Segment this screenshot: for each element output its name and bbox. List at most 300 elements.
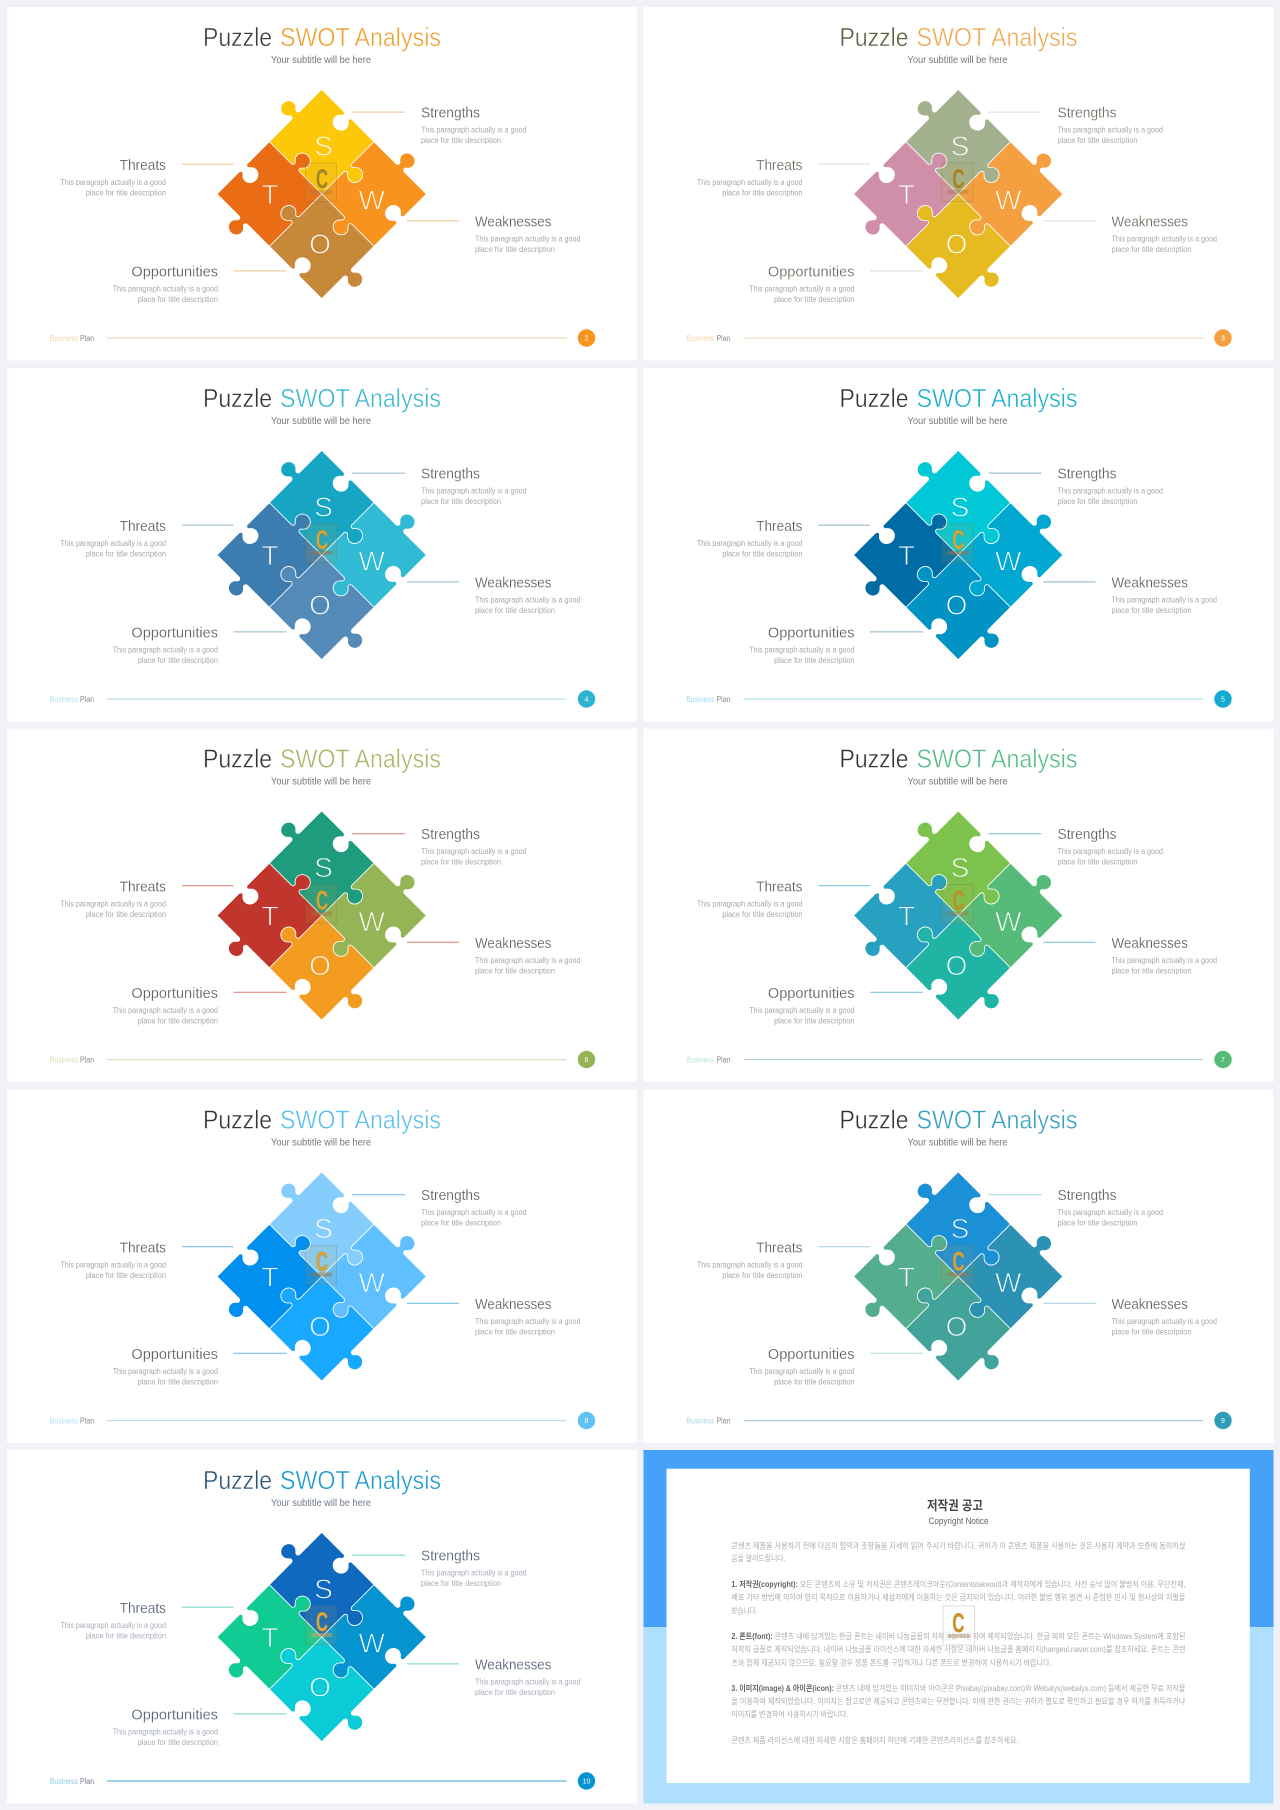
- threats block: [697, 880, 870, 919]
- footer: Business: [686, 695, 714, 704]
- puzzle diamond: T: [898, 900, 915, 932]
- opportunities block: This paragraph actually is a good: [113, 646, 218, 655]
- strengths block: This paragraph actually is a good: [1058, 486, 1163, 496]
- strengths block: Strengths: [421, 106, 480, 122]
- footer: 6: [585, 1057, 589, 1064]
- strengths block: This paragraph actually is a good: [421, 126, 526, 134]
- strengths block: place for title description: [1058, 1218, 1138, 1228]
- strengths block: [352, 106, 526, 145]
- strengths block: place for title description: [1058, 497, 1138, 506]
- watermark logo: C: [952, 525, 964, 555]
- footer: [686, 329, 1232, 347]
- puzzle diamond: W: [358, 906, 385, 937]
- title: Puzzle: [203, 744, 272, 774]
- puzzle diamond: O: [309, 1671, 331, 1702]
- opportunities block: This paragraph actually is a good: [113, 1367, 218, 1376]
- threats block: [60, 1601, 234, 1640]
- weaknesses block: Weaknesses: [475, 1658, 551, 1674]
- strengths block: Strengths: [1058, 827, 1116, 843]
- threats block: place for title description: [722, 1271, 802, 1280]
- footer: [50, 1772, 595, 1790]
- watermark logo: C: [316, 886, 328, 916]
- watermark logo: [306, 884, 336, 923]
- weaknesses block: [407, 936, 580, 976]
- weaknesses block: [1044, 1297, 1217, 1336]
- puzzle diamond: W: [995, 184, 1022, 215]
- threats block: Threats: [120, 519, 166, 535]
- copyright clause 3: 3. 이미지(image) & 아이콘(icon): 콘텐츠 내에 담겨있는 이미지와 아이콘은 Pixabay(pixabay.com)와 Webalys(webalys.com) 등에서 제공한 무료 저작물: [731, 1683, 1185, 1693]
- footer: 10: [583, 1778, 590, 1786]
- panel: slide 2 orange: [7, 7, 637, 360]
- footer: [686, 1051, 1232, 1068]
- opportunities block: place for title description: [774, 656, 854, 665]
- puzzle diamond: S: [314, 852, 333, 883]
- threats block: Threats: [756, 1240, 802, 1256]
- title: Puzzle: [203, 383, 272, 413]
- puzzle diamond: O: [946, 1311, 967, 1342]
- puzzle diamond: [841, 77, 1075, 311]
- threats block: [60, 880, 234, 919]
- puzzle diamond: S: [951, 1213, 969, 1244]
- footer: Plan: [716, 334, 730, 343]
- title: Puzzle: [203, 1465, 272, 1495]
- strengths block: This paragraph actually is a good: [1058, 1208, 1163, 1217]
- weaknesses block: place for title description: [1112, 966, 1192, 976]
- footer: [50, 690, 595, 708]
- opportunities block: This paragraph actually is a good: [113, 1728, 218, 1737]
- strengths block: [988, 1188, 1163, 1228]
- threats block: place for title description: [722, 550, 802, 558]
- puzzle diamond: O: [309, 589, 331, 620]
- watermark logo: C: [316, 164, 328, 194]
- strengths block: place for title description: [1058, 136, 1138, 145]
- footer: Plan: [80, 1416, 94, 1426]
- puzzle diamond: T: [261, 900, 279, 932]
- threats block: This paragraph actually is a good: [60, 1621, 166, 1630]
- watermark logo: [943, 1606, 975, 1645]
- weaknesses block: place for title description: [1112, 245, 1192, 254]
- opportunities block: [113, 265, 286, 304]
- footer: Business: [50, 695, 78, 704]
- panel: slide 10 navy teal: [7, 1450, 637, 1804]
- threats block: place for title description: [86, 910, 166, 919]
- weaknesses block: This paragraph actually is a good: [1112, 596, 1217, 605]
- strengths block: Strengths: [1058, 106, 1116, 122]
- footer: Plan: [80, 695, 94, 704]
- weaknesses block: Weaknesses: [1112, 936, 1188, 952]
- puzzle diamond: [205, 1159, 439, 1394]
- strengths block: Strengths: [421, 1548, 480, 1564]
- puzzle diamond: W: [358, 1627, 385, 1658]
- puzzle diamond: S: [951, 491, 969, 522]
- title: Puzzle: [840, 22, 908, 52]
- puzzle diamond: S: [314, 1573, 333, 1604]
- puzzle diamond: T: [898, 179, 915, 210]
- opportunities block: This paragraph actually is a good: [749, 1006, 854, 1015]
- threats block: place for title description: [722, 188, 802, 198]
- panel: slide 6 multicolor: [7, 728, 637, 1082]
- opportunities block: place for title description: [138, 1016, 218, 1026]
- threats block: [697, 158, 870, 198]
- watermark logo: [306, 163, 336, 202]
- subtitle: Your subtitle will be here: [271, 1138, 371, 1148]
- copyright clause 3: 이미지를 변경하여 사용하시기 바랍니다.: [731, 1709, 848, 1719]
- opportunities block: This paragraph actually is a good: [749, 1367, 854, 1376]
- strengths block: This paragraph actually is a good: [421, 1208, 526, 1217]
- weaknesses block: This paragraph actually is a good: [475, 956, 580, 965]
- puzzle diamond: O: [309, 228, 331, 259]
- opportunities block: [749, 1347, 923, 1386]
- watermark logo: [306, 1606, 336, 1644]
- opportunities block: Opportunities: [131, 626, 218, 642]
- puzzle diamond: [841, 1159, 1075, 1394]
- title: Puzzle: [203, 22, 272, 52]
- puzzle diamond: W: [358, 184, 385, 215]
- threats block: This paragraph actually is a good: [697, 539, 802, 548]
- panel: slide 7 green teal: [644, 728, 1274, 1082]
- weaknesses block: [1044, 215, 1217, 254]
- puzzle diamond: T: [898, 1262, 915, 1292]
- footer: [686, 1412, 1232, 1429]
- title: Puzzle: [203, 1104, 272, 1134]
- footer: Business: [686, 1056, 714, 1064]
- weaknesses block: This paragraph actually is a good: [475, 596, 580, 605]
- puzzle diamond: [205, 77, 439, 311]
- copyright clause 2: 츠와 함께 제공되지 않으므로, 필요할 경우 정품 폰트를 구입하거나 다른 폰트로 변경하여 사용하시기 바랍니다.: [731, 1658, 1051, 1668]
- title: [203, 1465, 441, 1495]
- strengths block: This paragraph actually is a good: [1058, 126, 1163, 134]
- footer: Plan: [80, 1777, 94, 1786]
- opportunities block: place for title description: [138, 1738, 218, 1747]
- strengths block: This paragraph actually is a good: [1058, 847, 1163, 856]
- strengths block: Strengths: [1058, 1188, 1116, 1204]
- footer: 7: [1221, 1057, 1225, 1064]
- threats block: place for title description: [86, 1271, 166, 1280]
- footer: 9: [1221, 1418, 1225, 1425]
- footer: Business: [50, 1777, 78, 1786]
- puzzle diamond: T: [261, 540, 279, 571]
- opportunities block: Opportunities: [131, 986, 218, 1002]
- puzzle diamond: O: [309, 1311, 331, 1342]
- subtitle: Your subtitle will be here: [908, 1138, 1008, 1148]
- footer: Business: [686, 334, 714, 343]
- weaknesses block: [1044, 576, 1217, 615]
- footer: Business: [50, 1056, 78, 1064]
- threats block: This paragraph actually is a good: [697, 900, 802, 908]
- footer: Business: [50, 334, 78, 343]
- strengths block: This paragraph actually is a good: [421, 1568, 526, 1578]
- puzzle diamond: W: [995, 906, 1022, 937]
- puzzle diamond: T: [261, 1262, 279, 1292]
- strengths block: place for title description: [421, 1579, 501, 1588]
- strengths block: This paragraph actually is a good: [421, 486, 526, 496]
- title: [840, 744, 1078, 774]
- opportunities block: [113, 1347, 286, 1386]
- opportunities block: [749, 986, 923, 1026]
- weaknesses block: place for title description: [1112, 1328, 1192, 1336]
- copyright intro text: [731, 1540, 1186, 1563]
- opportunities block: Opportunities: [768, 1347, 854, 1363]
- panel: slide 9 blue green: [644, 1090, 1274, 1443]
- threats block: This paragraph actually is a good: [697, 178, 802, 187]
- title: Puzzle: [840, 383, 908, 413]
- threats block: [697, 1240, 870, 1280]
- title: [203, 22, 441, 52]
- puzzle diamond: O: [309, 950, 331, 981]
- weaknesses block: Weaknesses: [475, 215, 551, 231]
- opportunities block: This paragraph actually is a good: [113, 1006, 218, 1015]
- subtitle: Your subtitle will be here: [271, 55, 371, 66]
- puzzle diamond: S: [314, 130, 333, 161]
- threats block: Threats: [120, 1601, 166, 1617]
- watermark logo: [942, 1246, 973, 1284]
- puzzle diamond: W: [358, 1267, 385, 1298]
- strengths block: [988, 106, 1163, 145]
- title: [203, 744, 441, 774]
- puzzle diamond: T: [898, 540, 915, 571]
- footer: 4: [585, 696, 589, 704]
- watermark logo: C: [316, 525, 328, 555]
- title: Puzzle: [840, 744, 908, 774]
- title: SWOT Analysis: [280, 744, 441, 774]
- weaknesses block: Weaknesses: [1112, 1297, 1188, 1313]
- subtitle: Your subtitle will be here: [271, 1498, 371, 1509]
- strengths block: place for title description: [1058, 858, 1138, 866]
- threats block: Threats: [120, 158, 166, 174]
- title: SWOT Analysis: [916, 383, 1078, 413]
- puzzle diamond: T: [261, 179, 279, 210]
- weaknesses block: This paragraph actually is a good: [475, 1678, 580, 1687]
- threats block: place for title description: [86, 550, 166, 558]
- watermark logo: C: [952, 164, 964, 194]
- watermark logo: [306, 1246, 336, 1284]
- copyright clause 2: 2. 폰트(font): 콘텐츠 내에 담겨있는 한글 폰트는 네이버 나눔글꼴의 저작권을 이용하여 제작되었습니다. 한글 외의 모든 폰트는 Windows System에 포함된: [731, 1631, 1185, 1641]
- threats block: Threats: [756, 880, 802, 896]
- copyright clause 1: 배포 기타 방법에 의하여 영리 목적으로 이용하거나 제삼자에게 이용하는 것은 금지되어 있습니다. 이러한 불법 행위 발견 시 준엄한 민사 및 형사상의 처벌을: [731, 1592, 1185, 1602]
- strengths block: place for title description: [421, 497, 501, 506]
- weaknesses block: [407, 215, 580, 254]
- weaknesses block: [407, 1297, 580, 1336]
- footer: 2: [585, 336, 589, 342]
- puzzle diamond: W: [995, 545, 1022, 576]
- opportunities block: Opportunities: [768, 626, 854, 642]
- watermark logo: C: [952, 1608, 964, 1638]
- strengths block: Strengths: [1058, 466, 1116, 482]
- watermark logo: [942, 524, 973, 562]
- footer: Plan: [80, 334, 94, 343]
- strengths block: Strengths: [421, 1188, 480, 1204]
- title: SWOT Analysis: [280, 22, 441, 52]
- opportunities block: place for title description: [138, 1378, 218, 1386]
- footer: 5: [1221, 696, 1225, 704]
- title: SWOT Analysis: [916, 22, 1078, 52]
- subtitle: Your subtitle will be here: [271, 416, 371, 427]
- footer: Business: [50, 1416, 78, 1426]
- threats block: [697, 519, 870, 558]
- puzzle diamond: W: [995, 1267, 1022, 1298]
- weaknesses block: This paragraph actually is a good: [1112, 956, 1217, 965]
- copyright heading: 저작권 공고: [927, 1498, 983, 1513]
- copyright heading: [927, 1498, 988, 1526]
- opportunities block: place for title description: [774, 1378, 854, 1386]
- puzzle diamond: S: [951, 130, 969, 161]
- subtitle: Your subtitle will be here: [908, 416, 1008, 427]
- strengths block: [988, 827, 1163, 866]
- threats block: Threats: [756, 519, 802, 535]
- puzzle diamond: T: [261, 1622, 279, 1653]
- strengths block: Strengths: [421, 466, 480, 482]
- strengths block: place for title description: [421, 1218, 501, 1228]
- opportunities block: place for title description: [138, 295, 218, 304]
- weaknesses block: [407, 576, 580, 615]
- opportunities block: Opportunities: [131, 1708, 218, 1724]
- copyright heading: Copyright Notice: [928, 1516, 988, 1526]
- opportunities block: Opportunities: [768, 986, 854, 1002]
- threats block: Threats: [120, 1240, 166, 1256]
- threats block: This paragraph actually is a good: [60, 539, 166, 548]
- strengths block: [988, 466, 1163, 506]
- footer: [50, 1412, 595, 1429]
- watermark logo: [306, 524, 336, 562]
- weaknesses block: Weaknesses: [1112, 215, 1188, 231]
- strengths block: This paragraph actually is a good: [421, 847, 526, 856]
- opportunities block: [113, 626, 286, 665]
- footer: Plan: [80, 1056, 94, 1064]
- weaknesses block: [407, 1658, 580, 1697]
- title: [840, 22, 1078, 52]
- panel: slide 4 steel blue: [7, 368, 637, 722]
- threats block: place for title description: [86, 1632, 166, 1640]
- weaknesses block: This paragraph actually is a good: [475, 1317, 580, 1326]
- subtitle: Your subtitle will be here: [908, 55, 1008, 66]
- copyright clause 2: 저작의 글꼴로 제작되었습니다. 네이버 나눔글꼴 라이선스에 대한 자세한 사항은 네이버 나눔글꼴 홈페이지(hangeul.naver.com)를 참조하세요. 폰트는 콘텐: [731, 1644, 1185, 1654]
- strengths block: place for title description: [421, 136, 501, 145]
- panel: copyright notice: [644, 1450, 1274, 1804]
- footer: [686, 690, 1232, 708]
- opportunities block: Opportunities: [131, 1347, 218, 1363]
- subtitle: Your subtitle will be here: [908, 776, 1008, 788]
- title: [203, 1104, 441, 1134]
- opportunities block: [749, 626, 923, 665]
- strengths block: [352, 466, 526, 506]
- opportunities block: [749, 265, 923, 304]
- strengths block: [352, 1188, 526, 1228]
- threats block: [60, 519, 234, 558]
- opportunities block: This paragraph actually is a good: [749, 285, 854, 294]
- weaknesses block: Weaknesses: [1112, 576, 1188, 592]
- threats block: place for title description: [86, 188, 166, 198]
- copyright clause 2: [731, 1631, 1185, 1668]
- puzzle diamond: [841, 798, 1075, 1033]
- title: [840, 1104, 1078, 1134]
- puzzle diamond: S: [951, 852, 969, 883]
- opportunities block: Opportunities: [768, 265, 854, 281]
- watermark logo: [942, 884, 973, 923]
- panel: slide 3 muted: [644, 7, 1274, 360]
- panel: slide 5 cyan: [644, 368, 1274, 722]
- footer: Plan: [716, 1416, 730, 1426]
- weaknesses block: place for title description: [475, 245, 555, 254]
- title: [203, 383, 441, 413]
- weaknesses block: place for title description: [1112, 606, 1192, 615]
- threats block: This paragraph actually is a good: [60, 900, 166, 908]
- threats block: [60, 158, 234, 198]
- opportunities block: place for title description: [774, 295, 854, 304]
- opportunities block: This paragraph actually is a good: [113, 285, 218, 294]
- opportunities block: This paragraph actually is a good: [749, 646, 854, 655]
- copyright clause 1: [731, 1579, 1185, 1616]
- threats block: place for title description: [722, 910, 802, 919]
- copyright closing line: 콘텐츠 제품 라이선스에 대한 자세한 사항은 홈페이지 하단에 기재한 콘텐츠라이선스를 참조하세요.: [731, 1735, 1018, 1745]
- footer: Plan: [716, 695, 730, 704]
- puzzle diamond: O: [946, 950, 967, 981]
- opportunities block: [113, 986, 286, 1026]
- strengths block: place for title description: [421, 858, 501, 866]
- opportunities block: place for title description: [774, 1016, 854, 1026]
- weaknesses block: [1044, 936, 1217, 976]
- opportunities block: place for title description: [138, 656, 218, 665]
- weaknesses block: place for title description: [475, 1328, 555, 1336]
- weaknesses block: This paragraph actually is a good: [1112, 235, 1217, 244]
- weaknesses block: This paragraph actually is a good: [1112, 1317, 1217, 1326]
- footer: [50, 1051, 595, 1068]
- title: SWOT Analysis: [280, 1465, 441, 1495]
- threats block: This paragraph actually is a good: [697, 1260, 802, 1270]
- title: SWOT Analysis: [280, 383, 441, 413]
- title: SWOT Analysis: [280, 1104, 441, 1134]
- copyright clause 1: 받습니다.: [731, 1606, 757, 1616]
- watermark logo: C: [316, 1246, 328, 1276]
- weaknesses block: Weaknesses: [475, 1297, 551, 1313]
- copyright clause 3: [731, 1683, 1186, 1719]
- strengths block: [352, 1548, 526, 1588]
- footer: [50, 329, 595, 347]
- weaknesses block: place for title description: [475, 606, 555, 615]
- watermark logo: C: [316, 1607, 328, 1637]
- strengths block: Strengths: [421, 827, 480, 843]
- puzzle diamond: [205, 1520, 439, 1754]
- title: Puzzle: [840, 1104, 908, 1134]
- footer: Plan: [716, 1056, 730, 1064]
- weaknesses block: place for title description: [475, 966, 555, 976]
- threats block: Threats: [120, 880, 166, 896]
- threats block: [60, 1240, 234, 1280]
- weaknesses block: Weaknesses: [475, 936, 551, 952]
- watermark logo: C: [952, 886, 964, 916]
- title: SWOT Analysis: [916, 744, 1078, 774]
- puzzle diamond: W: [358, 545, 385, 576]
- strengths block: [352, 827, 526, 866]
- watermark logo: C: [952, 1246, 964, 1276]
- footer: Business: [686, 1416, 714, 1426]
- weaknesses block: place for title description: [475, 1688, 555, 1697]
- subtitle: Your subtitle will be here: [271, 776, 371, 788]
- copyright intro text: 음을 알려드립니다.: [731, 1553, 785, 1563]
- weaknesses block: This paragraph actually is a good: [475, 235, 580, 244]
- footer: 3: [1221, 336, 1225, 342]
- copyright clause 1: 1. 저작권(copyright): 모든 콘텐츠의 소유 및 저작권은 콘텐츠레이크아웃(Contentstakeout)과 제작자에게 있습니다. 사전 승낙 없이 불법적 이용, 무단전재,: [731, 1579, 1185, 1589]
- title: [840, 383, 1078, 413]
- puzzle diamond: S: [314, 491, 333, 522]
- footer: 8: [585, 1418, 589, 1425]
- puzzle diamond: O: [946, 228, 967, 259]
- copyright intro text: 콘텐츠 제품을 사용하기 전에 다음의 협약과 조항들을 자세히 읽어 주시기 바랍니다. 귀하가 이 콘텐츠 제품을 사용하는 것은 사용자 계약과 보증에 동의하셨: [731, 1540, 1186, 1550]
- panel: slide 8 sky blue: [7, 1090, 637, 1443]
- threats block: Threats: [756, 158, 802, 174]
- puzzle diamond: [205, 438, 439, 672]
- opportunities block: [113, 1708, 286, 1747]
- title: SWOT Analysis: [916, 1104, 1078, 1134]
